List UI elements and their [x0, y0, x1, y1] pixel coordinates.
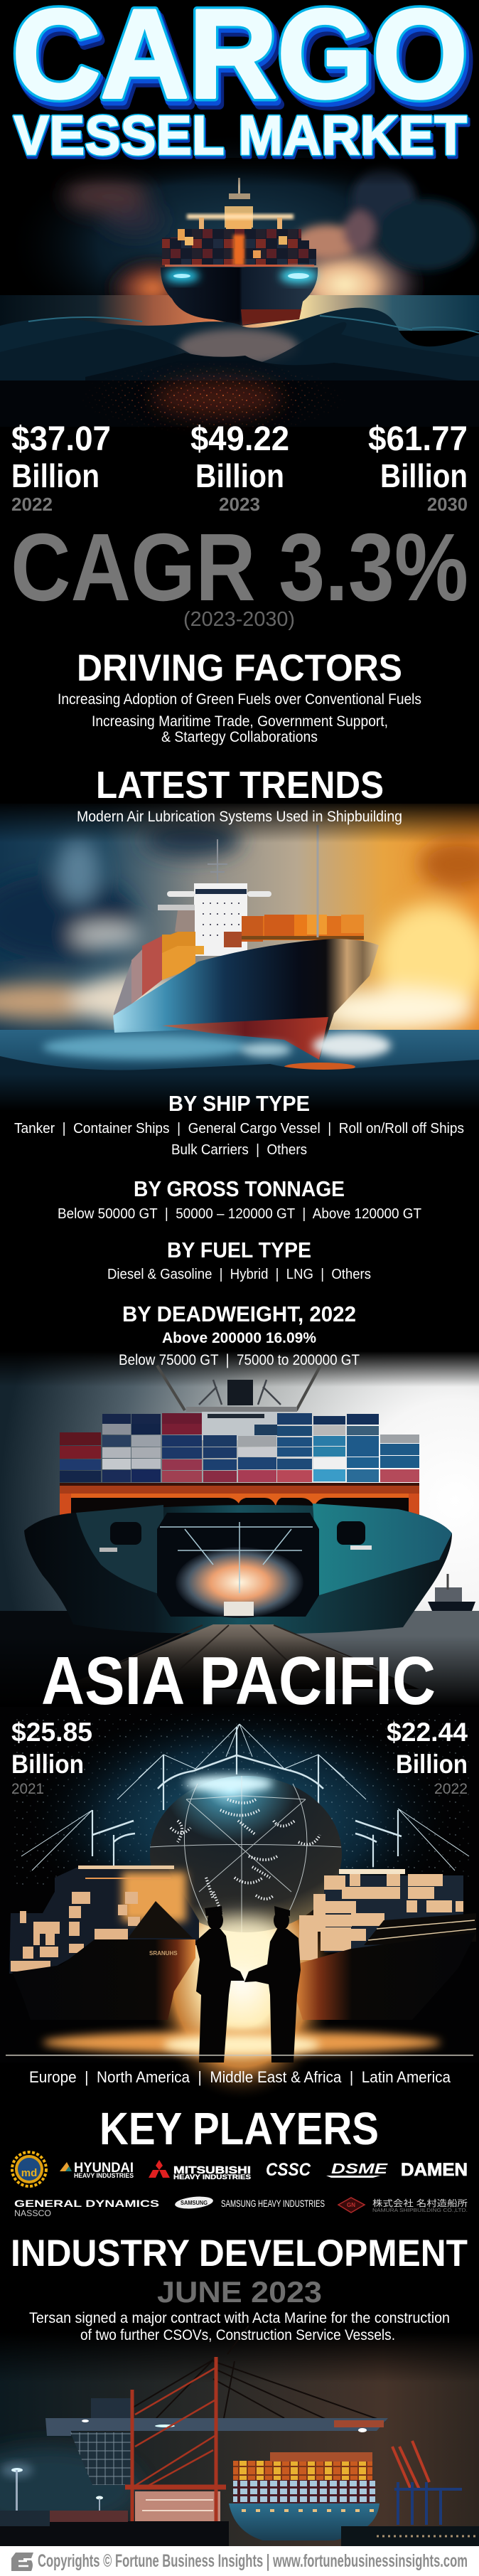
driving factors text: Increasing Adoption of Green Fuels over Conventional Fuels [58, 691, 421, 708]
logo: Samsung: SAMSUNG HEAVY INDUSTRIES [221, 2198, 325, 2209]
stat: 2022 market size: 2022 [11, 494, 53, 515]
water right [213, 1611, 479, 1707]
stars [14, 1714, 469, 1885]
stat: 2030 market size: 2030 [427, 494, 468, 515]
title line: VESSEL MARKET: VESSEL MARKET [14, 107, 469, 169]
logo: Samsung: SAMSUNG [181, 2200, 208, 2206]
left ship: SRANUHS [149, 1950, 178, 1957]
logo: CSSC: CSSC [266, 2160, 311, 2180]
globe [150, 1775, 342, 1932]
containers right [224, 915, 364, 947]
stat: 2021 regional size: 2021 [11, 1781, 44, 1797]
lights [1, 2463, 103, 2520]
stat: 2022 regional size: Billion [396, 1750, 468, 1779]
tower windows [208, 1414, 264, 1418]
blue bow lights [165, 269, 317, 283]
logo: Samsung [174, 2195, 325, 2210]
hull teal panel [313, 1503, 452, 1595]
blue haze [0, 2447, 142, 2532]
image panel: ship at sea [0, 800, 479, 1111]
hull keel red [241, 309, 301, 325]
hull red bottom [162, 1017, 328, 1060]
clouds right [295, 167, 476, 270]
top fade [0, 800, 479, 843]
logo: Namura Shipbuilding: 株式会社 名村造船所 [372, 2198, 468, 2208]
deadweight list: Below 75000 GT | 75000 to 200000 GT [119, 1352, 360, 1368]
water left dark [0, 1611, 213, 1707]
stat: 2022 regional size: 2022 [434, 1781, 468, 1797]
logo: General Dynamics NASSCO: GENERAL DYNAMICS [14, 2198, 159, 2209]
hull lights [242, 2509, 377, 2512]
top fade [0, 158, 479, 186]
logo: MDL gear [12, 2152, 46, 2186]
stat: 2022 market size [11, 420, 111, 515]
stat: 2023 market size: Billion [195, 457, 284, 494]
regions list: Europe | North America | Middle East & Africa | Latin America [29, 2068, 451, 2086]
blue glow [19, 1700, 460, 1942]
stat: 2022 regional size: $22.44 [387, 1718, 468, 1747]
bottom fade [0, 1074, 479, 1111]
opening door light [224, 1602, 254, 1616]
crane network [21, 1724, 469, 1870]
hull dark teal panel [76, 1505, 163, 1595]
stat: 2023 market size: 2023 [219, 494, 260, 515]
background cranes right [392, 2441, 462, 2525]
footer [0, 2546, 479, 2576]
ship type list: Tanker | Container Ships | General Cargo Vessel | Roll on/Roll off Ships [14, 1121, 464, 1137]
logo: DSME: DSME [331, 2161, 388, 2177]
heading: by deadweight: BY DEADWEIGHT, 2022 [122, 1302, 356, 1326]
fuel type list: Diesel & Gasoline | Hybrid | LNG | Others [107, 1267, 371, 1282]
crane stays [121, 2326, 385, 2422]
orange deck structure [60, 1483, 419, 1515]
logo: DSME [326, 2161, 388, 2178]
floor glow core [163, 2035, 320, 2055]
orange glow on water [153, 380, 281, 417]
image panel: ship with open bow [0, 1351, 479, 1707]
stat: 2023 market size: $49.22 [190, 420, 289, 458]
title line: VESSEL MARKET: VESSEL MARKET [14, 104, 467, 166]
heading: key players: KEY PLAYERS [99, 2103, 379, 2154]
top fade [0, 1351, 479, 1387]
right ship [294, 1869, 476, 2020]
stat: 2021 regional size: $25.85 [11, 1718, 92, 1747]
driving factors text: & Startegy Collaborations [161, 729, 318, 745]
stat: 2022 regional size [387, 1718, 468, 1797]
title [12, 0, 473, 169]
containers [60, 1413, 419, 1482]
quay left [0, 2521, 229, 2546]
logo: Hyundai Heavy Industries: HEAVY INDUSTRIES [74, 2172, 134, 2179]
stat: 2030 market size: $61.77 [368, 420, 468, 458]
opening lit interior [176, 1547, 303, 1618]
logo: Mitsubishi Heavy Industries: HEAVY INDUSTRIES [173, 2173, 251, 2181]
bridge deck [186, 1407, 297, 1412]
foreground waves [0, 1056, 479, 1111]
water right [341, 2526, 479, 2546]
logo: Namura Shipbuilding: GN [347, 2202, 355, 2208]
logo: General Dynamics NASSCO: NASSCO [14, 2208, 51, 2218]
bottom fade [0, 1636, 479, 1707]
crane boom [45, 2398, 388, 2485]
port lights right [377, 2535, 479, 2538]
bow wave foam [43, 1033, 391, 1059]
crane frame [125, 2357, 226, 2532]
hull [24, 1505, 452, 1634]
stat: 2030 market size: Billion [380, 457, 468, 494]
warm glow left of ship [99, 252, 206, 324]
heading: by fuel type: BY FUEL TYPE [167, 1238, 311, 1262]
quay containers [0, 2511, 128, 2526]
image panel: port at night [0, 2326, 479, 2546]
top fade [0, 2333, 479, 2383]
ramp [57, 1624, 419, 1689]
ship containers lower [233, 2480, 375, 2503]
ship type list [14, 1121, 464, 1158]
development text [29, 2310, 450, 2343]
containers left [114, 932, 204, 1016]
deadweight leader: Above 200000 16.09% [162, 1330, 316, 1346]
mast right [317, 825, 318, 937]
logo: MDL gear: md [21, 2167, 37, 2179]
crane arms [157, 1366, 321, 1410]
ship hull [161, 267, 318, 326]
ramp rails [107, 1625, 377, 1671]
red foam [284, 1063, 355, 1071]
warm glow over lower globe [192, 1917, 291, 1974]
base lights [142, 2500, 213, 2523]
logo: General Dynamics NASSCO [14, 2198, 159, 2218]
stat: 2022 market size: $37.07 [11, 420, 111, 458]
logo: Mitsubishi Heavy Industries [149, 2160, 251, 2181]
development text: of two further CSOVs, Construction Service Vessels. [80, 2327, 395, 2343]
hawse holes [99, 1521, 372, 1552]
driving factors text: Increasing Maritime Trade, Government Support, [92, 713, 388, 730]
latest trends text: Modern Air Lubrication Systems Used in Shipbuilding [77, 809, 402, 825]
left figure [195, 1906, 244, 2063]
CAGR period: (2023-2030) [183, 608, 295, 631]
logo: Mitsubishi Heavy Industries: MITSUBISHI [173, 2164, 251, 2176]
development text: Tersan signed a major contract with Acta Marine for the construction [29, 2310, 450, 2326]
bow opening [157, 1513, 319, 1617]
orange sparkles [82, 363, 342, 430]
crane base glow [135, 2491, 220, 2534]
image panel: container ship at night [0, 132, 479, 430]
left ship [9, 1866, 199, 2020]
opening frame [160, 1522, 313, 1593]
gross tonnage list: Below 50000 GT | 50000 – 120000 GT | Above 120000 GT [58, 1206, 421, 1222]
driving factors text [58, 691, 421, 745]
heading: latest trends: LATEST TRENDS [96, 764, 384, 807]
development date: JUNE 2023 [157, 2275, 322, 2309]
stat: 2021 regional size: Billion [11, 1750, 84, 1779]
ship hull [229, 2503, 380, 2540]
ship superstructure [187, 178, 294, 243]
warm glow behind ship [259, 231, 430, 338]
stat: 2030 market size [368, 420, 468, 515]
image panel: global trade handshake [0, 1700, 479, 2102]
tower [202, 1412, 279, 1440]
icon: Fortune Business Insights logo [11, 2553, 33, 2571]
heading: driving factors: DRIVING FACTORS [77, 647, 402, 689]
mast left [208, 839, 227, 885]
logo: Hyundai Heavy Industries: HYUNDAI [74, 2161, 134, 2176]
sky clouds [0, 821, 479, 1031]
hull [113, 939, 379, 1060]
heading: by ship type: BY SHIP TYPE [168, 1091, 310, 1116]
stat: 2022 market size: Billion [11, 457, 99, 494]
deck lights [165, 265, 314, 267]
title line: VESSEL MARKET: VESSEL MARKET [14, 104, 467, 166]
ship containers upper [233, 2452, 372, 2480]
stat: 2021 regional size [11, 1718, 92, 1797]
horizon sea [0, 295, 479, 331]
ship containers [162, 229, 316, 266]
logo: Hyundai Heavy Industries [60, 2161, 134, 2179]
central warm glow [146, 1853, 338, 2102]
logo: Namura Shipbuilding: NAMURA SHIPBUILDING CO.,LTD. [372, 2208, 468, 2213]
floor glow [43, 2031, 441, 2054]
sea [0, 1030, 479, 1111]
ship type list: Bulk Carriers | Others [171, 1142, 307, 1158]
stat: 2023 market size [190, 420, 289, 515]
heading: by gross tonnage: BY GROSS TONNAGE [134, 1176, 345, 1201]
right figure [244, 1906, 301, 2063]
bridge block [227, 1380, 253, 1405]
small ship [428, 1574, 475, 1611]
logo: Namura Shipbuilding [338, 2198, 468, 2213]
mast frame [199, 1380, 281, 1405]
superstructure [158, 883, 271, 956]
clouds left [64, 178, 163, 233]
logo: Damen: DAMEN [401, 2160, 468, 2180]
waves [0, 308, 479, 427]
heading: Asia Pacific: ASIA PACIFIC [41, 1643, 436, 1719]
